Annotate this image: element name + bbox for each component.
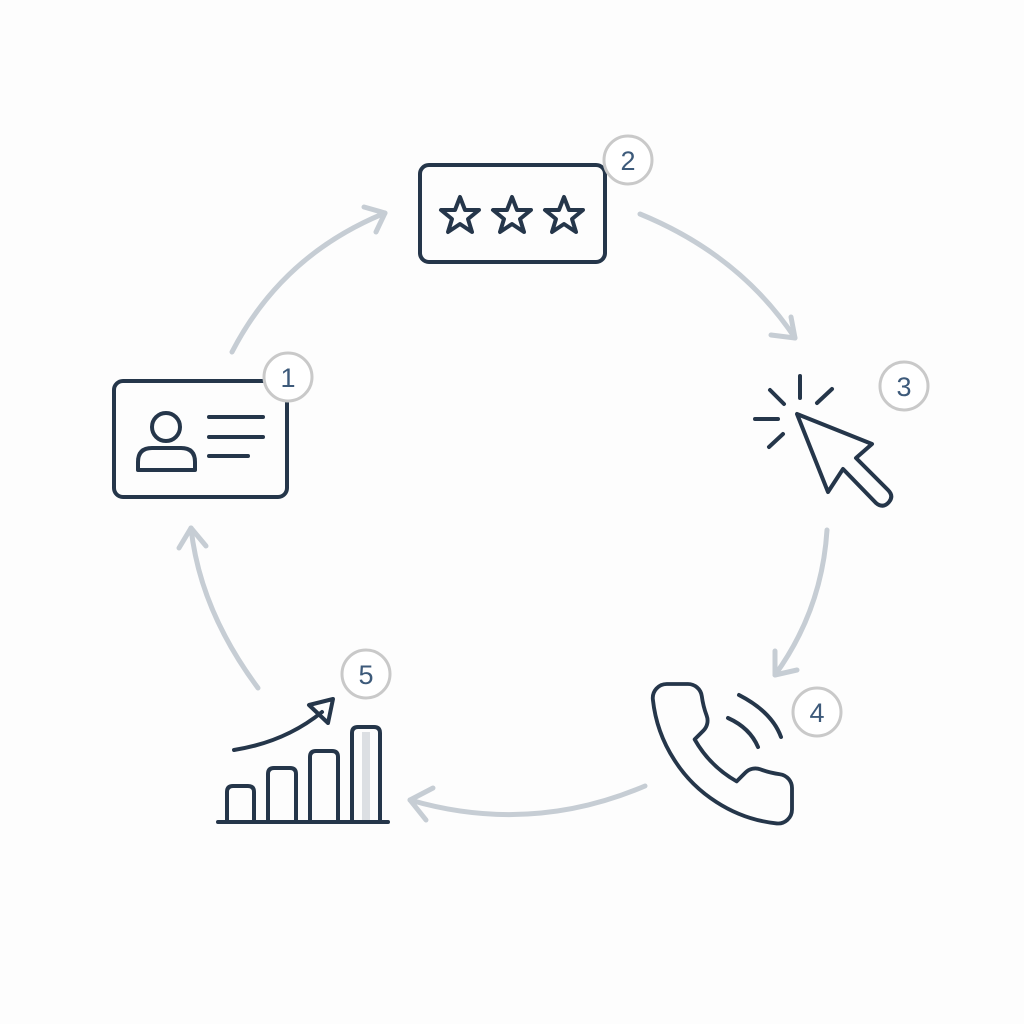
badge 3 [880, 362, 928, 410]
arrow: 2 to 3 [640, 214, 795, 338]
arrow: 1 to 2 [232, 207, 385, 352]
arrow: 5 to 1 [179, 528, 258, 688]
badge 5: 5 [358, 660, 374, 690]
badge 2 [604, 136, 652, 184]
badge 1 [264, 353, 312, 401]
badge 5 [342, 650, 390, 698]
badge 4: 4 [809, 698, 825, 728]
badge 4 [793, 688, 841, 736]
icon: profile card [114, 381, 287, 497]
icon: click cursor [755, 376, 891, 506]
arrow: 3 to 4 [775, 530, 827, 675]
icon: growth chart [218, 699, 388, 822]
badge 2: 2 [620, 146, 636, 176]
icon: phone call [653, 684, 792, 823]
badge 3: 3 [896, 372, 912, 402]
icon: rating stars [420, 165, 605, 262]
arrow: 4 to 5 [410, 786, 645, 820]
badge 1: 1 [280, 363, 296, 393]
